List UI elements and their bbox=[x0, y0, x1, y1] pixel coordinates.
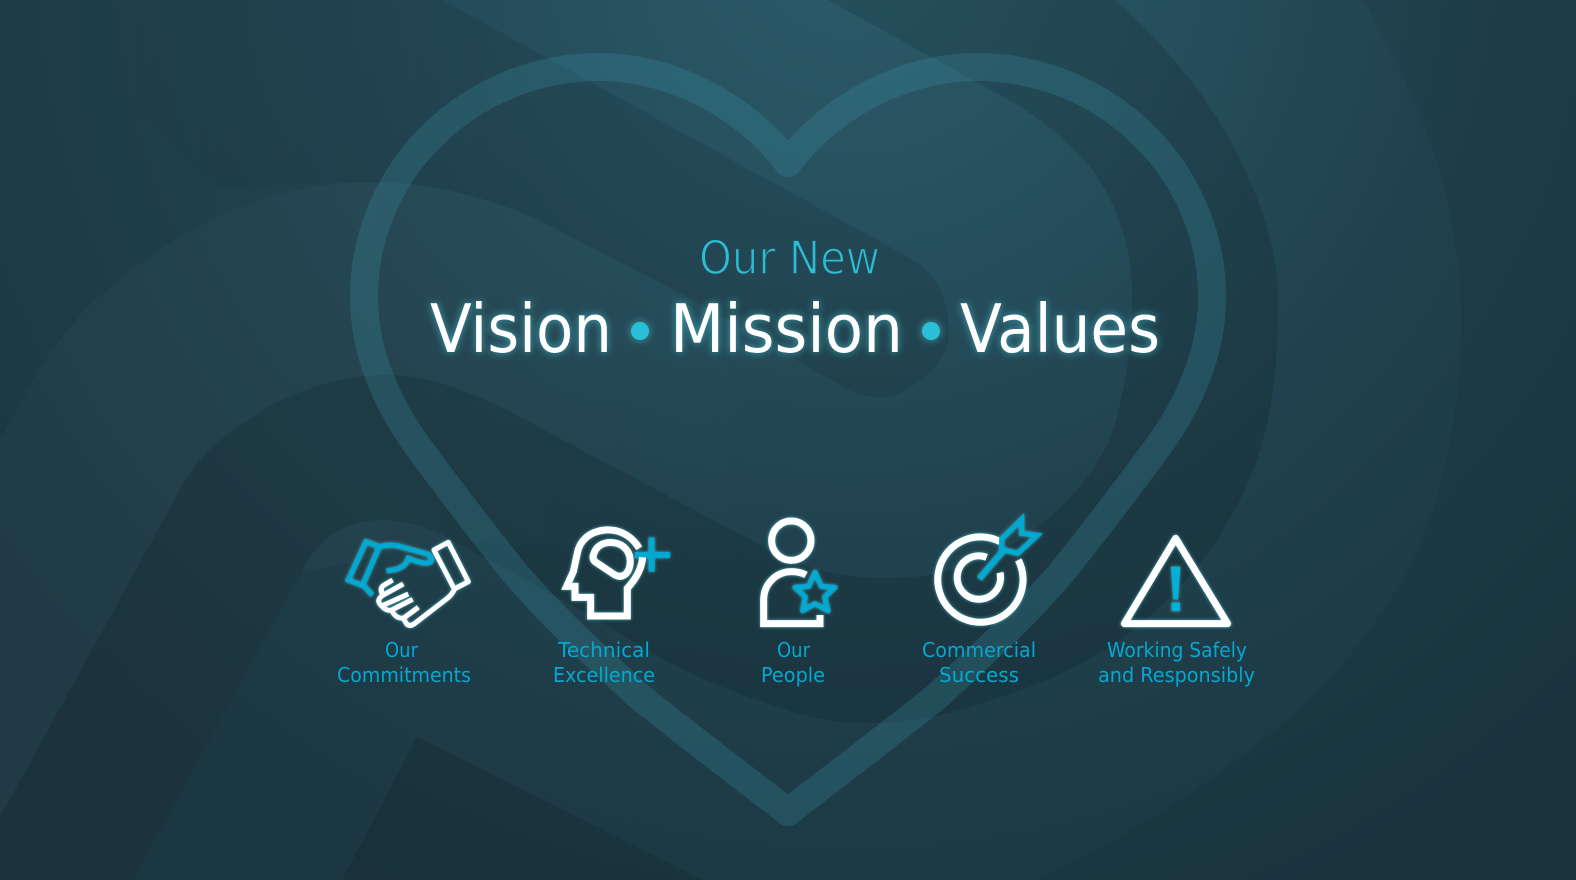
icon: warning triangle bbox=[1124, 538, 1228, 624]
label: Commercial Success bbox=[922, 638, 1036, 687]
title: Our New: Our New bbox=[699, 231, 880, 285]
label: Our People: People bbox=[761, 663, 825, 687]
icon: head with plus bbox=[567, 530, 670, 616]
icon: handshake bbox=[348, 542, 468, 625]
title: Vision Mission Values: Values bbox=[960, 290, 1160, 368]
label: Working Safely and Responsibly: and Responsibly bbox=[1098, 663, 1255, 687]
title: Vision Mission Values bbox=[430, 290, 1160, 368]
icon: person with star bbox=[764, 521, 835, 624]
label: Commercial Success: Commercial bbox=[922, 638, 1036, 662]
label: Working Safely and Responsibly bbox=[1098, 638, 1255, 687]
label: Technical Excellence: Technical bbox=[557, 638, 650, 662]
label: Working Safely and Responsibly: Working Safely bbox=[1107, 638, 1247, 662]
label: Our People bbox=[761, 638, 825, 687]
label: Our People: Our bbox=[777, 638, 810, 662]
label: Commercial Success: Success bbox=[939, 663, 1019, 687]
heart outline bbox=[364, 67, 1212, 812]
icon: target with arrow bbox=[938, 519, 1037, 622]
label: Our Commitments: Commitments bbox=[337, 663, 471, 687]
label: Our Commitments bbox=[337, 638, 471, 687]
label: Technical Excellence bbox=[553, 638, 655, 687]
label: Technical Excellence: Excellence bbox=[553, 663, 655, 687]
title: Vision Mission Values: Vision bbox=[430, 290, 612, 368]
title: Vision Mission Values: Mission bbox=[670, 290, 903, 368]
label: Our Commitments: Our bbox=[385, 638, 418, 662]
